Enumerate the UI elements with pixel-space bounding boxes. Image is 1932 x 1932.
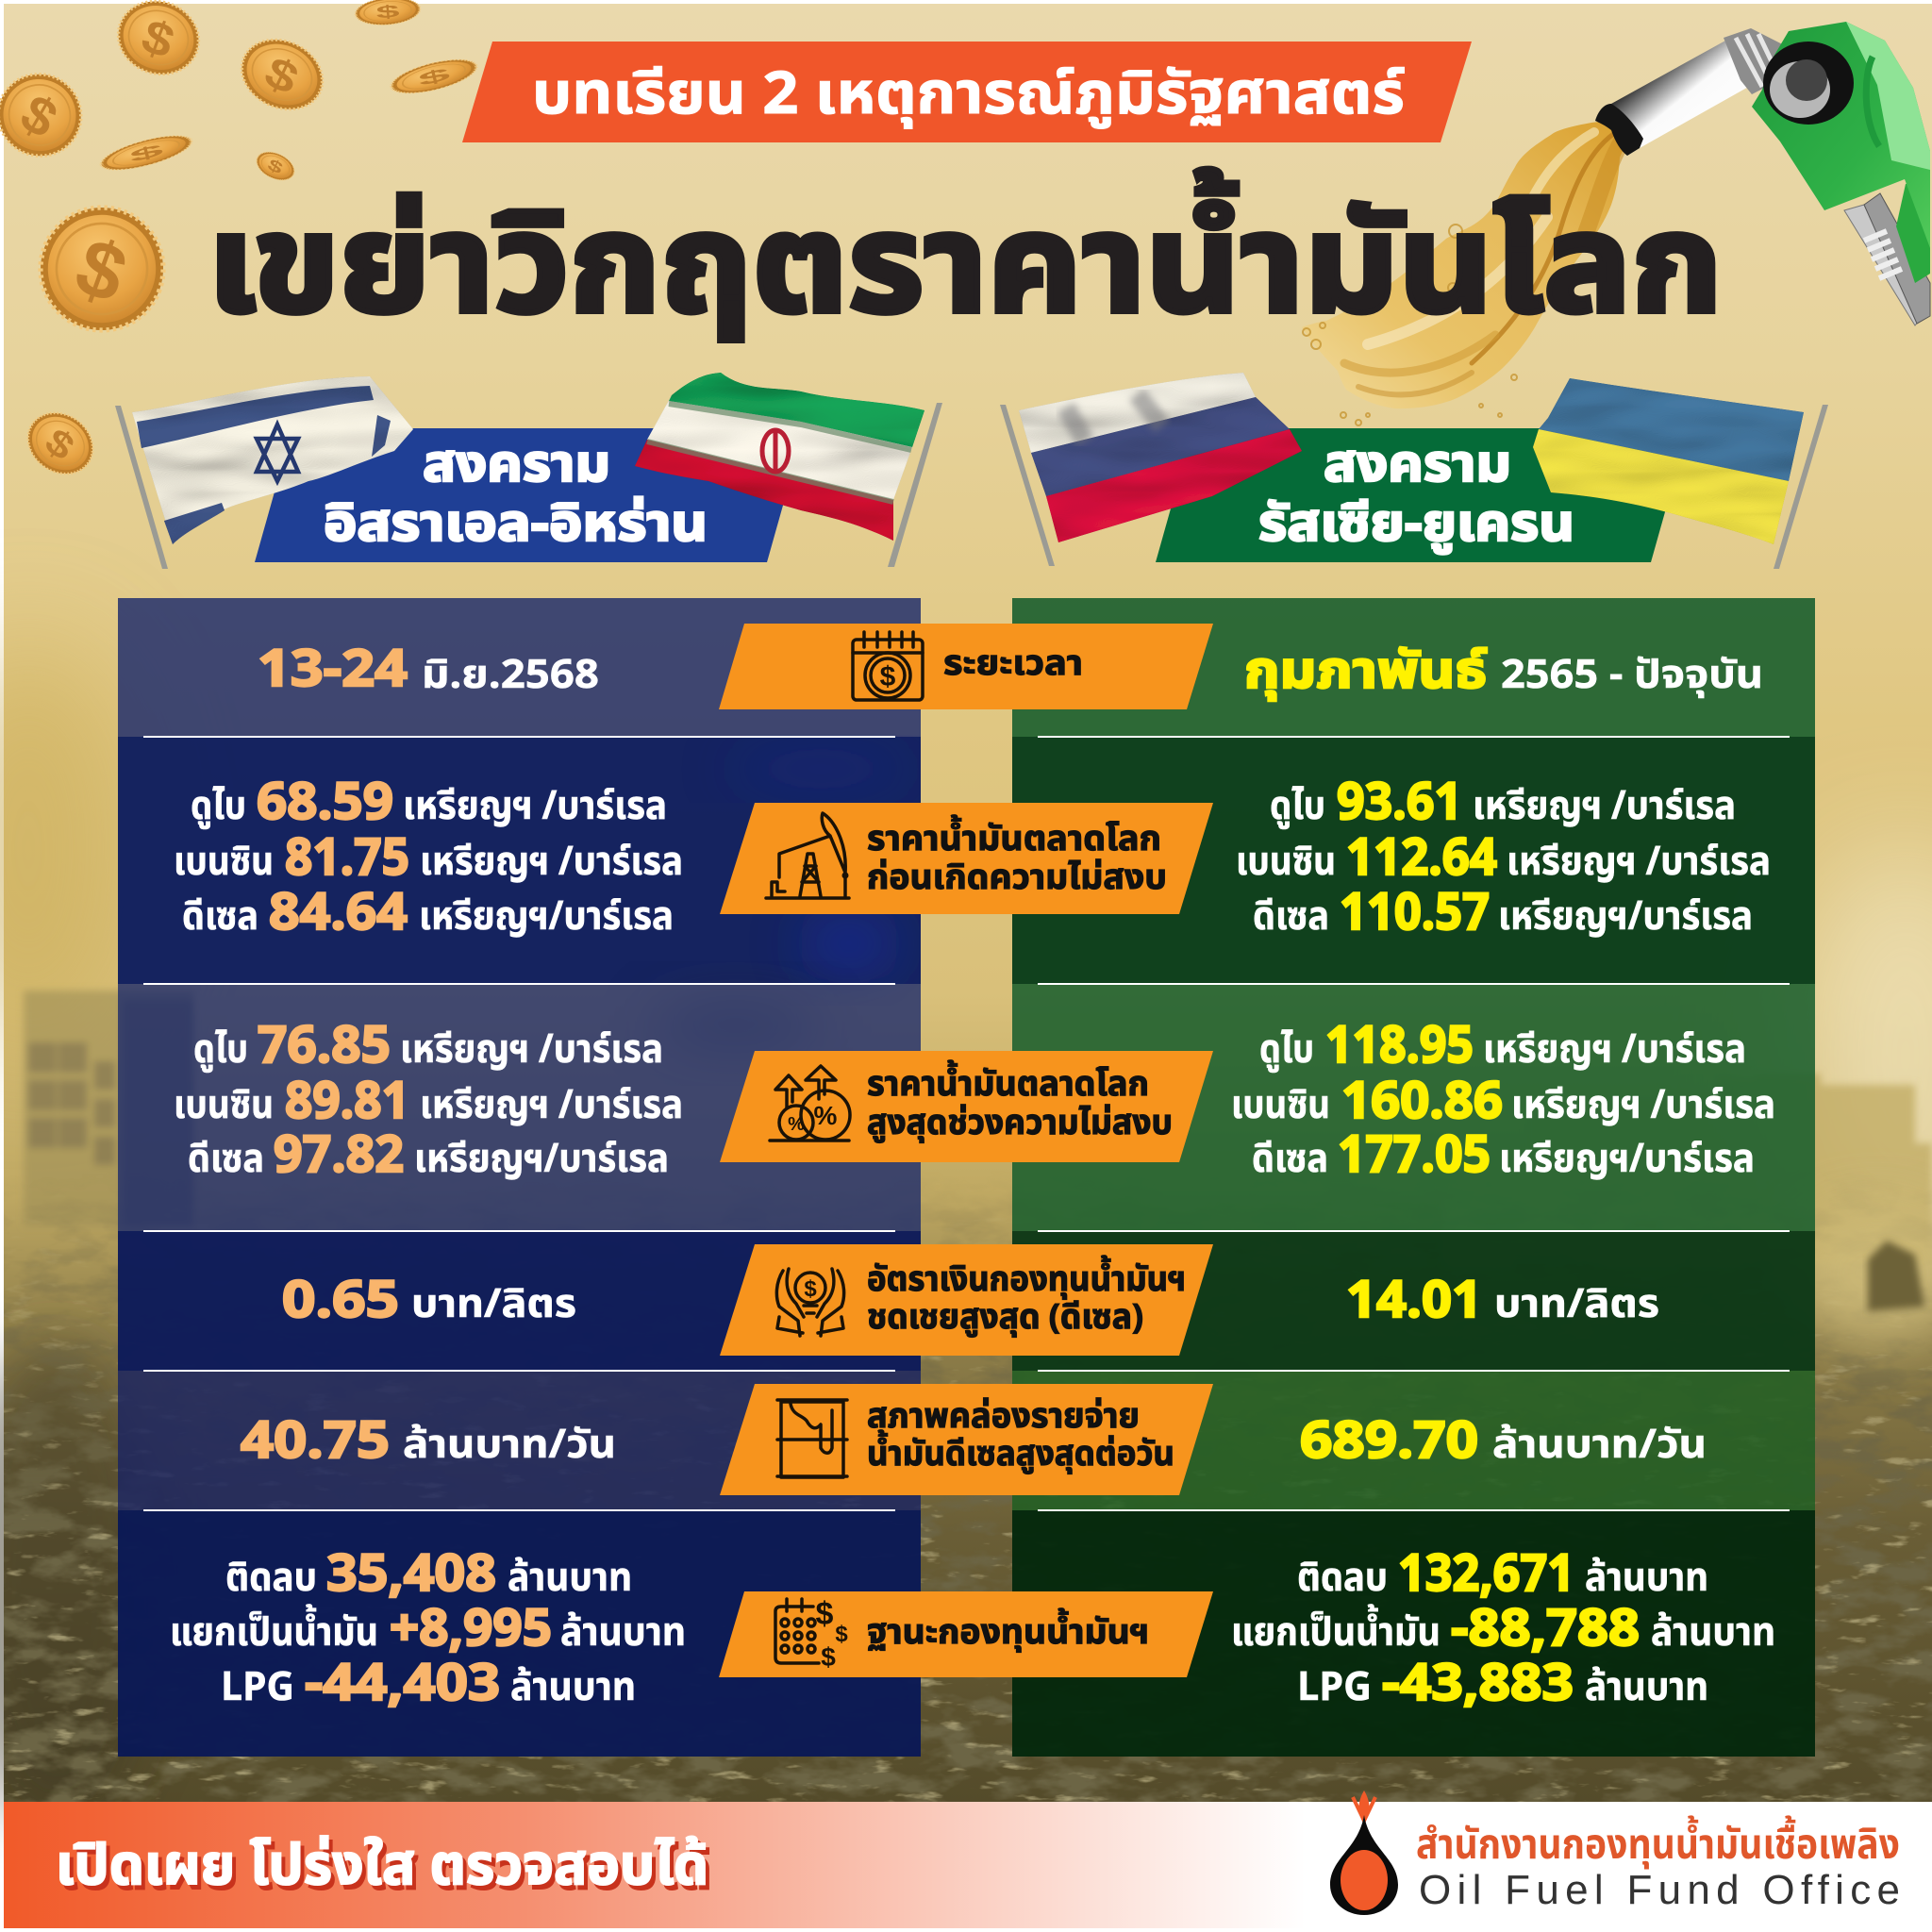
row: fund status left: -44,403: [305, 1647, 500, 1724]
row: prices peak right: [1231, 1009, 1775, 1195]
row: liquidity left: [241, 1405, 616, 1481]
ruined buildings left: [24, 991, 193, 1226]
row: prices before right: เบนซิน: [1236, 832, 1336, 892]
row: compensation left: 0.65: [282, 1264, 399, 1341]
row: compensation right: บาท/ลิตร: [1494, 1274, 1659, 1335]
row: prices before right: [1236, 766, 1771, 953]
row: prices peak right: เหรียญฯ /บาร์เรล: [1511, 1075, 1775, 1136]
row: fund status left: ล้านบาท: [510, 1657, 636, 1718]
green body: [1752, 22, 1930, 248]
row: prices before right: 112.64: [1346, 822, 1497, 898]
icon: calculator dollars: $: [821, 1642, 836, 1672]
row: prices peak left: เหรียญฯ/บาร์เรล: [414, 1129, 669, 1190]
war header: Russia-Ukraine: [1000, 373, 1828, 569]
row: prices before left: เหรียญฯ /บาร์เรล: [420, 832, 683, 892]
row: fund status right: LPG: [1297, 1657, 1372, 1718]
icon: calendar coin: [853, 632, 923, 700]
row: compensation right: 14.01: [1346, 1264, 1482, 1341]
row: prices before right: 110.57: [1340, 876, 1490, 953]
row: prices before left: เหรียญฯ /บาร์เรล: [403, 776, 667, 837]
row: fund status right: ล้านบาท: [1651, 1603, 1775, 1663]
icon: oil barrel: [777, 1400, 847, 1477]
label: peak price during conflict: [720, 1051, 1213, 1162]
footer slogan: เปิดเผย โปร่งใส ตรวจสอบได้: [59, 1828, 712, 1914]
text: label lines: [867, 1255, 1186, 1344]
icon: calendar coin: $: [880, 661, 896, 692]
row: fund status right: 132,671: [1398, 1538, 1574, 1614]
row: prices before left: 84.64: [269, 876, 408, 953]
row: prices before right: 93.61: [1337, 766, 1462, 842]
panel: Russia-Ukraine table: [1012, 598, 1815, 1757]
footer slogan: เปิดเผย โปร่งใส ตรวจสอบได้: [56, 1824, 708, 1909]
row: prices peak right: เหรียญฯ /บาร์เรล: [1483, 1020, 1746, 1080]
row: prices peak left: เบนซิน: [174, 1075, 274, 1136]
office name: [1416, 1814, 1900, 1913]
row: prices peak left: 97.82: [274, 1119, 404, 1195]
text: label lines: [867, 814, 1167, 905]
row: prices peak left: 89.81: [285, 1065, 409, 1141]
text: label lines: [867, 1392, 1174, 1481]
text: label lines: ชดเชยสูงสุด (ดีเซล): [867, 1293, 1143, 1344]
label: duration: ระยะเวลา: [943, 640, 1083, 691]
row: prices peak right: 177.05: [1338, 1119, 1491, 1195]
chrome spout: [1611, 35, 1760, 156]
row: compensation left: บาท/ลิตร: [411, 1274, 576, 1335]
flag: Russia: [1000, 373, 1302, 566]
row: liquidity left: ล้านบาท/วัน: [403, 1415, 616, 1475]
row: prices before left: 81.75: [285, 822, 409, 898]
row: prices before left: 68.59: [257, 766, 393, 842]
row: prices peak left: [174, 1009, 683, 1195]
row: fund status left: ติดลบ: [225, 1548, 317, 1608]
row: fund status right: ติดลบ: [1297, 1548, 1388, 1608]
text: war name: [1258, 428, 1574, 564]
flag: Iran: [635, 373, 942, 567]
icon: rising percent: %: [814, 1101, 838, 1130]
label: price before conflict: [720, 803, 1213, 914]
label: fund compensation rate: [720, 1244, 1213, 1356]
row: prices peak left: ดูไบ: [193, 1020, 248, 1080]
row: fund status left: 35,408: [326, 1538, 496, 1614]
row: duration left: [258, 633, 599, 709]
row: prices before right: ดีเซล: [1253, 887, 1329, 947]
flag: Israel: [115, 376, 413, 569]
row: fund status right: -88,788: [1451, 1592, 1640, 1669]
row: prices before left: ดีเซล: [182, 887, 258, 947]
office name: Oil Fuel Fund Office: [1419, 1867, 1900, 1913]
row: fund status left: ล้านบาท: [560, 1603, 686, 1663]
top banner: บทเรียน 2 เหตุการณ์ภูมิรัฐศาสตร์: [532, 51, 1405, 140]
row: duration right: กุมภาพันธ์: [1244, 635, 1487, 711]
row: liquidity right: [1300, 1405, 1707, 1481]
row: prices peak left: 76.85: [258, 1009, 391, 1086]
label: diesel liquidity: [720, 1384, 1213, 1495]
row: fund status left: ล้านบาท: [508, 1548, 632, 1608]
row: duration left: 13-24: [258, 633, 408, 709]
text: war name: [324, 428, 708, 564]
war header: Israel-Iran: [115, 373, 942, 569]
text: label lines: อัตราเงินกองทุนน้ำมันฯ: [867, 1255, 1186, 1307]
icon: calculator dollars: $: [835, 1622, 848, 1647]
row: fund status left: แยกเป็นน้ำมัน: [170, 1603, 378, 1663]
row: duration left: มิ.ย.2568: [422, 645, 599, 706]
text: war name: รัสเซีย-ยูเครน: [1258, 488, 1574, 564]
row: compensation left: [282, 1264, 576, 1341]
oil splash: [1302, 122, 1636, 425]
icon: rising percent: [770, 1066, 850, 1141]
label: fund status: ฐานะกองทุนน้ำมันฯ: [867, 1607, 1149, 1659]
banner: Israel-Iran: [255, 428, 805, 562]
row: fund status right: ล้านบาท: [1585, 1657, 1708, 1718]
icon: rising percent: %: [788, 1114, 805, 1135]
row: fund status right: [1231, 1538, 1775, 1724]
row: prices before left: ดูไบ: [191, 776, 246, 837]
fuel nozzle: [1595, 22, 1930, 325]
nozzle handle: [1844, 179, 1930, 325]
text: label lines: ราคาน้ำมันตลาดโลก: [867, 1059, 1149, 1111]
row: prices before left: เบนซิน: [174, 832, 274, 892]
spring collar: [1724, 28, 1816, 94]
row: prices peak right: ดีเซล: [1252, 1129, 1328, 1190]
row: prices before right: ดูไบ: [1270, 776, 1325, 837]
row: fund status left: +8,995: [390, 1592, 552, 1669]
row: liquidity right: 689.70: [1300, 1405, 1478, 1481]
row: prices before left: [174, 766, 683, 953]
icon: calculator dollars: $: [816, 1596, 834, 1632]
row: fund status right: ล้านบาท: [1585, 1548, 1708, 1608]
text: war name: สงคราม: [1324, 428, 1511, 505]
row: duration right: 2565 - ปัจจุบัน: [1501, 645, 1763, 706]
row: prices peak left: ดีเซล: [188, 1129, 264, 1190]
row: compensation right: [1346, 1264, 1659, 1341]
main title: เขย่าวิกฤตราคาน้ำมันโลก: [208, 165, 1723, 374]
logo: oil fuel fund office: [1330, 1790, 1398, 1915]
row: duration right: [1244, 635, 1763, 711]
row: prices peak right: 118.95: [1325, 1009, 1474, 1086]
label: duration: [719, 624, 1213, 709]
row: prices peak left: เหรียญฯ /บาร์เรล: [400, 1020, 663, 1080]
text: label lines: ก่อนเกิดความไม่สงบ: [867, 854, 1167, 905]
row: fund status right: แยกเป็นน้ำมัน: [1231, 1603, 1441, 1663]
panel: Israel-Iran table: [118, 598, 921, 1757]
text: label lines: สูงสุดช่วงความไม่สงบ: [867, 1099, 1173, 1150]
icon: hands holding coin: [776, 1269, 844, 1336]
row: prices peak right: 160.86: [1341, 1065, 1503, 1141]
row: prices peak right: เหรียญฯ/บาร์เรล: [1499, 1129, 1755, 1190]
text: label lines: น้ำมันดีเซลสูงสุดต่อวัน: [867, 1429, 1174, 1481]
coins: [0, 0, 479, 486]
text: label lines: [867, 1059, 1173, 1150]
text: label lines: สภาพคล่องรายจ่าย: [867, 1392, 1140, 1443]
label: fund status: [719, 1591, 1213, 1677]
row: prices before right: เหรียญฯ /บาร์เรล: [1473, 776, 1736, 837]
row: prices peak right: ดูไบ: [1259, 1020, 1314, 1080]
row: fund status left: [170, 1538, 686, 1724]
icon: oil pump jack: [766, 813, 849, 898]
footer bar: [4, 1790, 1932, 1928]
row: fund status right: -43,883: [1382, 1647, 1574, 1724]
row: fund status left: LPG: [221, 1657, 294, 1718]
icon: hands holding coin: $: [804, 1276, 817, 1302]
banner: Russia-Ukraine: [1156, 428, 1689, 562]
text: label lines: ราคาน้ำมันตลาดโลก: [867, 814, 1161, 866]
flag: Ukraine: [1533, 378, 1828, 569]
row: prices peak right: เบนซิน: [1231, 1075, 1330, 1136]
ruined buildings right: [1443, 1074, 1932, 1264]
row: liquidity right: ล้านบาท/วัน: [1492, 1415, 1707, 1475]
text: war name: สงคราม: [423, 428, 610, 505]
row: prices peak left: เหรียญฯ /บาร์เรล: [420, 1075, 683, 1136]
row: liquidity left: 40.75: [241, 1405, 390, 1481]
row: prices before right: เหรียญฯ/บาร์เรล: [1498, 887, 1753, 947]
row: prices before left: เหรียญฯ/บาร์เรล: [419, 887, 674, 947]
text: war name: อิสราเอล-อิหร่าน: [324, 488, 708, 564]
row: prices before right: เหรียญฯ /บาร์เรล: [1507, 832, 1771, 892]
icon: calculator dollars: [775, 1596, 848, 1672]
